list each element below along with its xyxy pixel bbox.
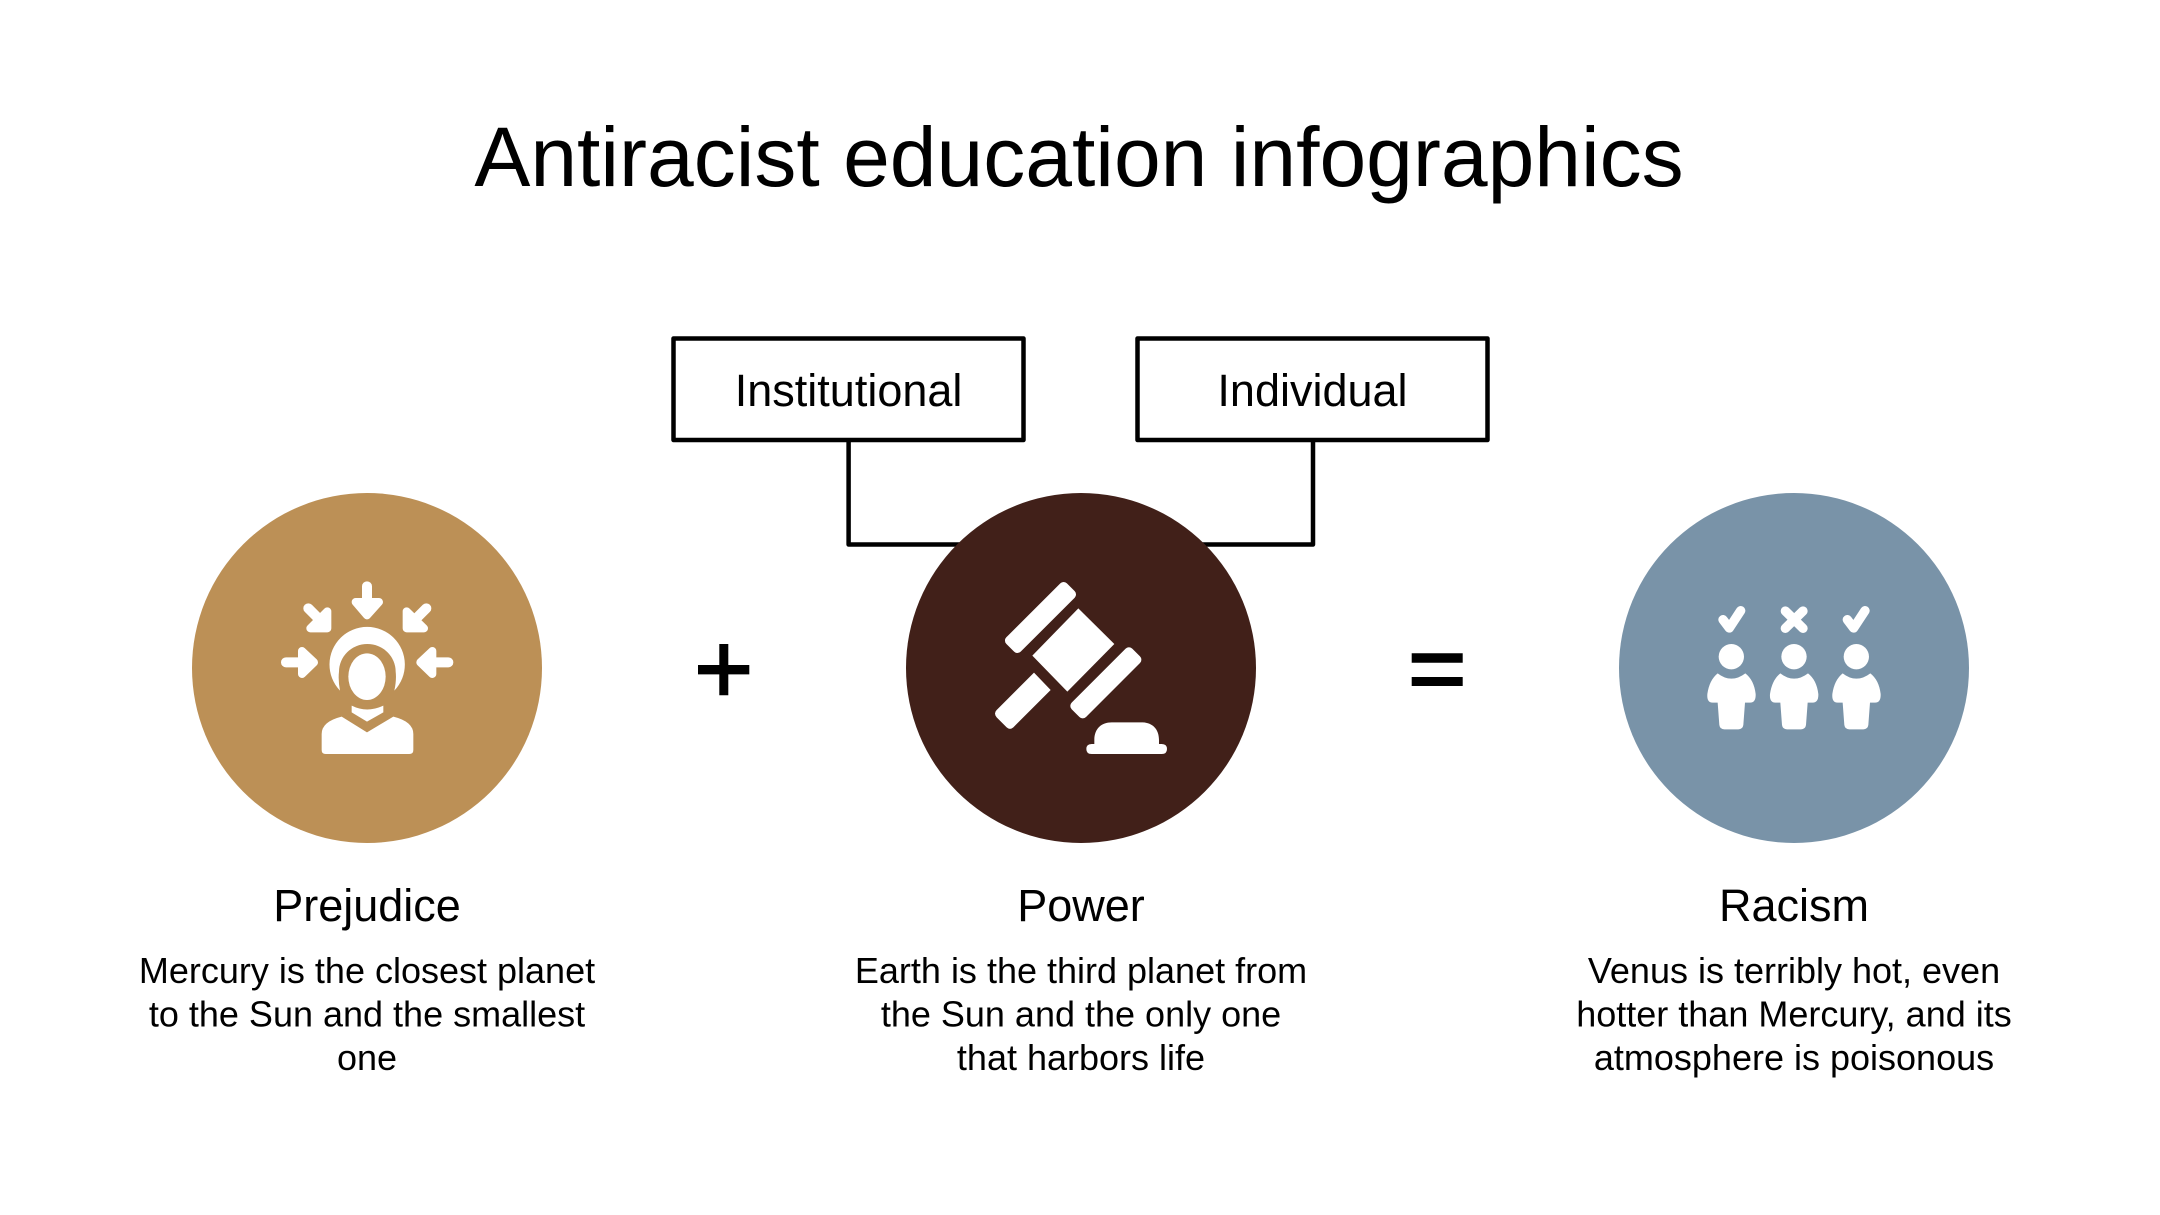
equals sign (1412, 653, 1463, 686)
text: Power description: Earth is the third planet from (855, 950, 1307, 991)
icon: gavel (995, 580, 1167, 754)
plus sign (698, 644, 749, 695)
title: Antiracist education infographics (474, 110, 1684, 204)
box: Institutional: Institutional (735, 365, 962, 416)
text: Prejudice description: Mercury is the closest planet (139, 950, 595, 991)
connector: Institutional to Power (849, 440, 1000, 544)
text: Racism description: hotter than Mercury, and its (1576, 994, 2012, 1034)
icon: three people with check and cross marks (1707, 611, 1881, 729)
heading: Power: Power (1017, 880, 1145, 931)
icon: person with arrows pointing at head (286, 586, 448, 754)
circle: Racism (1619, 493, 1969, 843)
text: Racism description: Venus is terribly hot, even (1588, 950, 2000, 991)
text: Prejudice description: one (337, 1037, 397, 1078)
circle: Prejudice (192, 493, 542, 843)
text: Racism description: atmosphere is poisonous (1594, 1037, 1994, 1078)
box: Individual: Individual (1217, 365, 1408, 416)
text: Power description: the Sun and the only one (881, 994, 1281, 1034)
box: Institutional (674, 338, 1024, 440)
box: Individual (1138, 338, 1488, 440)
heading: Prejudice: Prejudice (273, 880, 461, 931)
circle: Power (906, 493, 1256, 843)
text: Power description: that harbors life (957, 1037, 1205, 1078)
text: Prejudice description: to the Sun and the smallest (149, 994, 585, 1034)
connector: Individual to Power (1160, 440, 1313, 544)
heading: Racism: Racism (1719, 880, 1869, 931)
